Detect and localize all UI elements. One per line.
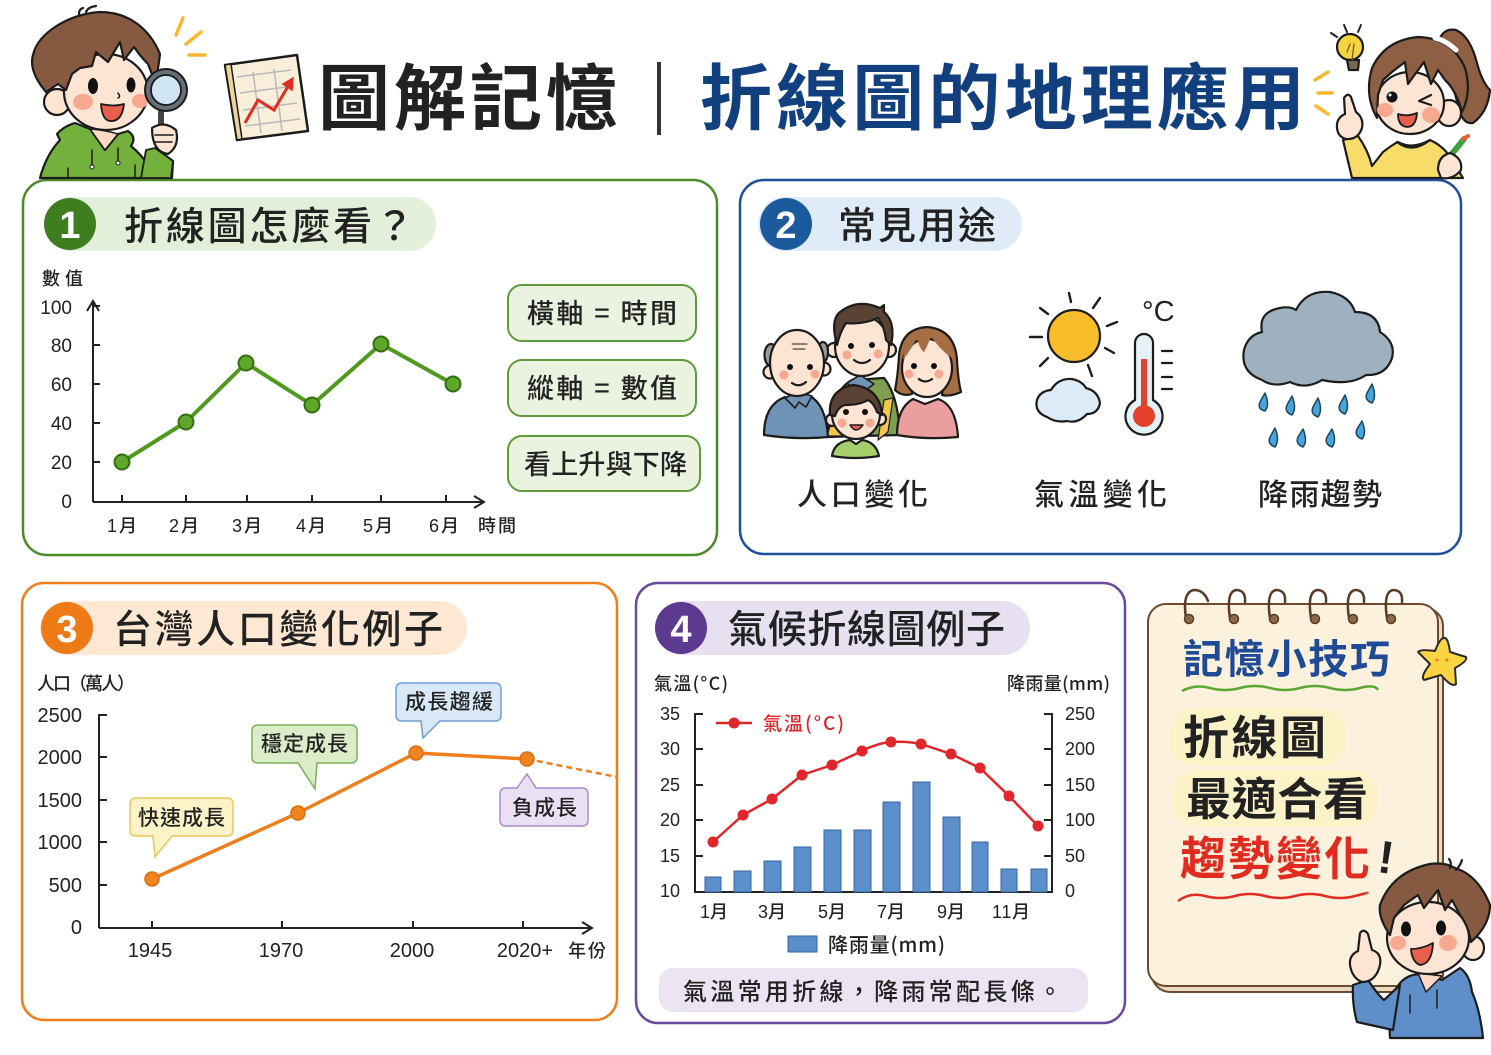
climate chart: temperature line and rainfall bars: 9月: [937, 902, 965, 922]
line chart: population by year: 2020+: [497, 940, 553, 962]
line chart: population by year: 1000: [38, 832, 82, 854]
panel: climate chart example: [636, 583, 1125, 1023]
climate chart: temperature line and rainfall bars: 11月: [992, 902, 1030, 922]
climate chart: temperature line and rainfall bars: 30: [660, 739, 680, 759]
callout: negative growth: [500, 774, 588, 826]
callout: negative growth: 負成長: [512, 792, 577, 822]
highlight text: trend changes: 趨勢變化: [1180, 823, 1370, 889]
line chart: months versus values: 5月: [363, 516, 393, 536]
highlight text: trend changes: !: [1375, 830, 1397, 884]
line chart: months versus values: 20: [51, 453, 72, 474]
icon: family: [764, 304, 961, 458]
climate chart: temperature line and rainfall bars: 氣溫(°C): [654, 670, 728, 696]
chip: rise and fall: 看上升與下降: [524, 443, 687, 482]
climate chart: temperature line and rainfall bars: 5月: [818, 902, 846, 922]
line chart: population by year: 0: [71, 917, 82, 939]
line chart: months versus values: 時間: [478, 516, 516, 536]
line chart: months versus values: 40: [51, 414, 72, 435]
magnifying glass: [158, 112, 164, 130]
climate chart: temperature line and rainfall bars: 200: [1065, 739, 1095, 759]
character: boy in blue hoodie pointing: [1350, 859, 1490, 1038]
callout: stable growth: [252, 725, 357, 789]
pointing hand: [1350, 931, 1380, 982]
decorative sparkles: boy: [176, 18, 205, 55]
line chart: months versus values: 80: [51, 336, 72, 357]
father head: [827, 343, 841, 357]
heading: section 4: 4: [670, 609, 692, 651]
line chart: population by year: 2000: [390, 940, 434, 962]
title part one: 圖解記憶: [318, 40, 618, 145]
highlight text: best for viewing: 最適合看: [1186, 763, 1368, 828]
label: temperature change: 氣溫變化: [1034, 470, 1167, 514]
line chart: population by year: 2000: [38, 747, 82, 769]
icon: sun, cloud and thermometer: [1030, 293, 1172, 435]
chip: rise and fall: [508, 436, 700, 491]
climate chart: temperature line and rainfall bars: 1月: [700, 902, 728, 922]
legend: temperature: [716, 709, 844, 736]
climate chart: temperature line and rainfall bars: 降雨量(mm): [1007, 670, 1110, 696]
heading: section 1: 1: [59, 205, 81, 247]
notebook heading: memory tips: 記憶小技巧: [1183, 627, 1390, 685]
panel: Taiwan population example: [22, 583, 617, 1020]
callout: slowing growth: [396, 683, 501, 738]
line chart: months versus values: 2月: [169, 516, 199, 536]
line chart: months versus values: 100: [40, 298, 72, 319]
label: degrees celsius on the thermometer: °C: [1142, 296, 1175, 328]
panel: how to read a line chart: [23, 180, 717, 555]
decorative rays: girl and bulb: [1315, 25, 1361, 114]
callout: rapid growth: [130, 798, 233, 857]
panel: common uses: [740, 180, 1461, 554]
title part two: 折線圖的地理應用: [700, 40, 1305, 145]
heading: section 3: 3: [56, 609, 78, 651]
child: [832, 440, 879, 458]
climate chart: temperature line and rainfall bars: 10: [660, 881, 680, 901]
highlight text: line charts: 折線圖: [1183, 702, 1326, 768]
line chart: months versus values: 1月: [107, 516, 137, 536]
climate chart: temperature line and rainfall bars: 25: [660, 775, 680, 795]
label: population change: 人口變化: [797, 470, 928, 514]
heading: section 1: 折線圖怎麼看？: [124, 196, 414, 252]
heading: section 2: 常見用途: [838, 195, 996, 250]
climate chart: temperature line and rainfall bars: [654, 670, 1110, 958]
climate chart: temperature line and rainfall bars: 15: [660, 846, 680, 866]
icon: star: [1418, 638, 1466, 685]
climate chart: temperature line and rainfall bars: 7月: [877, 902, 905, 922]
head: [44, 89, 70, 115]
climate chart: temperature line and rainfall bars: 150: [1065, 775, 1095, 795]
line chart: population by year: 1945: [128, 940, 172, 962]
chip: horizontal axis: 橫軸 = 時間: [527, 292, 677, 331]
line chart: months versus values: 0: [61, 492, 72, 513]
legend: rainfall: 降雨量(mm): [828, 929, 945, 958]
line chart: months versus values: 6月: [429, 516, 459, 536]
light bulb: [1337, 34, 1363, 60]
ponytail: [1440, 30, 1490, 123]
blue hoodie body: [1388, 968, 1483, 1038]
notebook: memory tip: [1148, 590, 1466, 992]
line chart: population by year: [37, 670, 617, 963]
line chart: population by year: 年份: [568, 937, 606, 963]
chip: vertical axis: 縱軸 = 數值: [527, 367, 677, 406]
line chart: months versus values: [40, 265, 516, 536]
grandfather: [764, 396, 828, 438]
climate chart: temperature line and rainfall bars: 35: [660, 704, 680, 724]
head: [1462, 936, 1484, 960]
head: [1437, 100, 1461, 126]
character: boy with magnifying glass: [32, 6, 187, 178]
icon: rain cloud: [1243, 292, 1393, 447]
green wavy underline: [1182, 686, 1378, 691]
callout: stable growth: 穩定成長: [261, 728, 348, 758]
caption: temperature uses lines, rainfall uses bars: 氣溫常用折線，降雨常配長條。: [683, 972, 1062, 1007]
green hoodie: [40, 123, 173, 178]
heading: section 3: 台灣人口變化例子: [113, 599, 443, 655]
heading: section 2: 2: [775, 205, 797, 247]
character: girl with light bulb: [1337, 30, 1490, 178]
climate chart: temperature line and rainfall bars: 100: [1065, 810, 1095, 830]
line chart: population by year: 1970: [259, 940, 303, 962]
title divider: [657, 62, 661, 135]
legend: temperature: 氣溫(°C): [763, 709, 844, 736]
climate chart: temperature line and rainfall bars: 0: [1065, 881, 1075, 901]
title: [318, 40, 1305, 145]
father body: [827, 378, 900, 437]
callout: slowing growth: 成長趨緩: [405, 686, 493, 716]
yellow sweater: [1343, 136, 1463, 178]
chip: horizontal axis: [508, 285, 696, 341]
climate chart: temperature line and rainfall bars: 50: [1065, 846, 1085, 866]
green pencil: [1451, 139, 1464, 155]
climate chart: temperature line and rainfall bars: 20: [660, 810, 680, 830]
line chart: population by year: 1500: [38, 790, 82, 812]
line chart: months versus values: 60: [51, 375, 72, 396]
mother: [897, 399, 958, 438]
heading: section 2: [758, 195, 1022, 251]
label: rainfall trend: 降雨趨勢: [1258, 470, 1382, 514]
climate chart: temperature line and rainfall bars: 250: [1065, 704, 1095, 724]
line chart: months versus values: 4月: [296, 516, 326, 536]
pointing hand: [1337, 95, 1362, 139]
line chart: months versus values: 數值: [42, 265, 83, 291]
line chart: population by year: 500: [49, 875, 82, 897]
icon: line chart paper: [225, 55, 308, 140]
red wavy underline: [1178, 893, 1368, 901]
callout: rapid growth: 快速成長: [138, 802, 225, 832]
heading: section 4: 氣候折線圖例子: [728, 599, 1005, 655]
line chart: population by year: 人口（萬人）: [37, 670, 135, 696]
chip: vertical axis: [508, 360, 696, 416]
line chart: months versus values: 3月: [232, 516, 262, 536]
notebook rings: [1184, 590, 1402, 624]
climate chart: temperature line and rainfall bars: 3月: [758, 902, 786, 922]
line chart: population by year: 2500: [38, 705, 82, 727]
